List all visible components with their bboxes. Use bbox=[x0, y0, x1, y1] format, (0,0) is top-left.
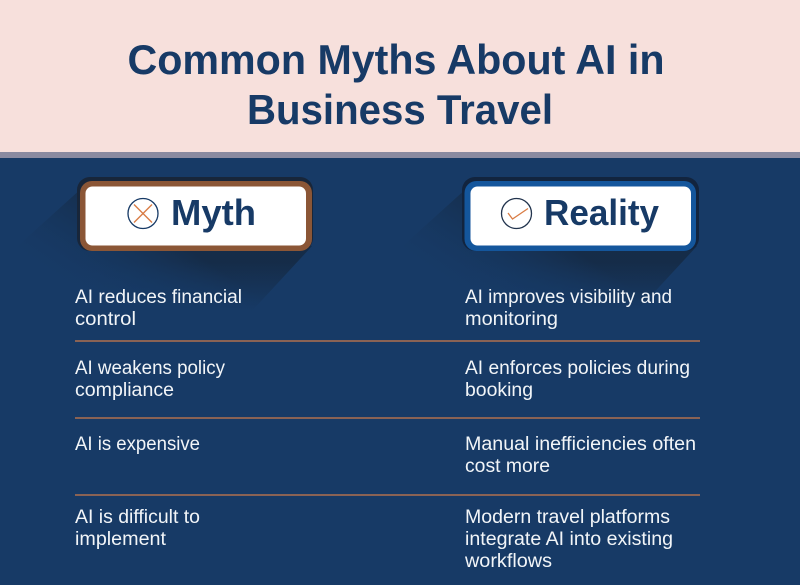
myth 4 bbox=[75, 507, 200, 550]
title bbox=[128, 36, 664, 133]
reality 1: monitoring bbox=[465, 309, 558, 330]
reality label: Reality bbox=[544, 192, 659, 233]
myth list bbox=[75, 287, 242, 550]
myth 2 bbox=[75, 358, 225, 401]
reality 4 bbox=[464, 507, 673, 572]
reality 1 bbox=[465, 287, 672, 330]
header divider bbox=[0, 152, 800, 158]
myth 1: AI reduces financial bbox=[75, 287, 242, 308]
reality 4: workflows bbox=[464, 551, 552, 572]
reality 3 bbox=[465, 434, 696, 477]
myth 3: AI is expensive bbox=[75, 434, 200, 455]
icon: crossed circle bbox=[128, 198, 158, 228]
myth 4: AI is difficult to bbox=[75, 507, 200, 528]
title: Common Myths About AI in bbox=[128, 36, 664, 83]
reality list bbox=[464, 287, 696, 572]
panel: myth column header bbox=[77, 177, 313, 251]
reality 1: AI improves visibility and bbox=[465, 287, 672, 308]
reality 3: Manual inefficiencies often bbox=[465, 434, 696, 455]
row dividers bbox=[75, 341, 700, 495]
header band bbox=[0, 0, 800, 152]
myth 1: control bbox=[75, 309, 136, 330]
myth 2: compliance bbox=[75, 380, 174, 401]
myth 4: implement bbox=[75, 529, 167, 550]
reality 4: integrate AI into existing bbox=[465, 529, 673, 550]
reality 4: Modern travel platforms bbox=[465, 507, 670, 528]
myth 2: AI weakens policy bbox=[75, 358, 225, 379]
reality 3: cost more bbox=[465, 456, 550, 477]
reality 2: AI enforces policies during bbox=[465, 358, 690, 379]
long shadows behind header cards bbox=[0, 188, 800, 312]
myth 1 bbox=[75, 287, 242, 330]
title: Business Travel bbox=[247, 86, 553, 133]
myth label: Myth bbox=[171, 192, 256, 233]
icon: check circle bbox=[502, 198, 532, 228]
reality 2 bbox=[465, 358, 690, 401]
reality 2: booking bbox=[465, 380, 533, 401]
panel: reality column header bbox=[462, 177, 699, 251]
